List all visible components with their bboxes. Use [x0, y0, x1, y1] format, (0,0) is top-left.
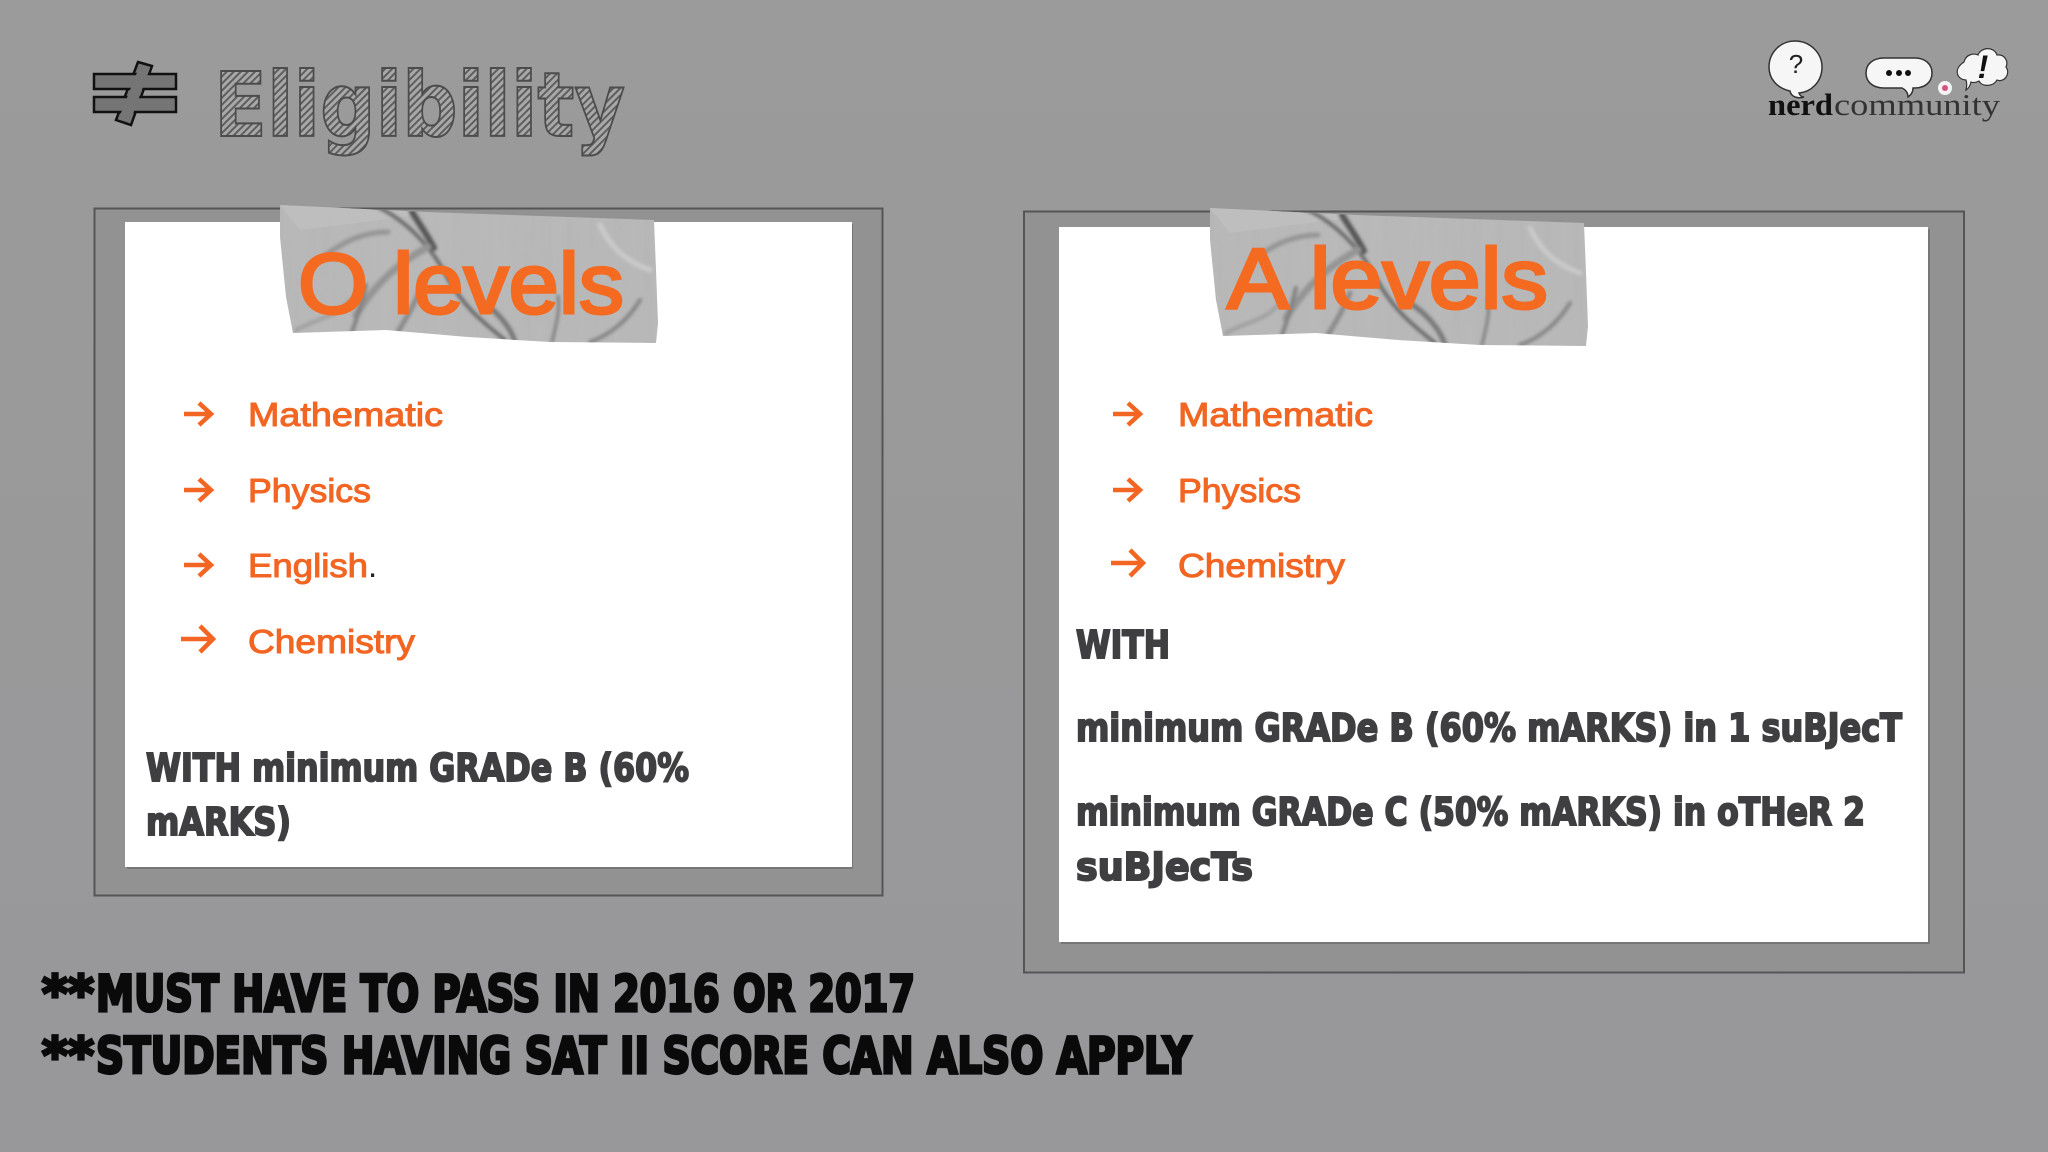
- footnotes: MUST HAVE TO PASS IN 2016 OR 2017: [96, 965, 915, 1023]
- list: subjects: [1111, 396, 1373, 584]
- panel frame: [94, 208, 882, 896]
- icon: question speech bubble: ?: [1789, 49, 1803, 79]
- panel: A levels: [1024, 206, 1964, 972]
- icon: exclamation cloud bubble: !: [1978, 49, 1989, 85]
- item: Physics: Physics: [1178, 472, 1301, 509]
- requirement text: WITH: [1076, 623, 1170, 667]
- requirement text: WITH minimum GRADe B (60%: [146, 746, 689, 790]
- item: Chemistry: Chemistry: [1178, 547, 1346, 584]
- requirement text: minimum GRADe B (60% mARKS) in 1 suBJecT: [1076, 706, 1902, 750]
- icon: not-equal symbol: [94, 62, 176, 125]
- title: Eligibility: [214, 53, 625, 157]
- panel: O levels: [94, 203, 882, 896]
- tape: [1208, 206, 1590, 348]
- arrow: [1113, 403, 1140, 425]
- requirement text: suBJecTs: [1076, 845, 1253, 889]
- heading: O levels: O levels: [298, 237, 624, 332]
- heading: A levels: A levels: [1227, 232, 1548, 327]
- footnotes: **: [42, 1027, 94, 1085]
- logo wordmark: nerd: [1768, 87, 1833, 122]
- footnotes: **: [42, 965, 94, 1023]
- item: Mathematic: Mathematic: [248, 396, 443, 433]
- item: English: English .: [248, 547, 377, 584]
- paper sheet: [125, 222, 853, 869]
- requirement text: mARKS): [146, 800, 291, 844]
- tape: [278, 203, 660, 345]
- item: Chemistry: Chemistry: [248, 623, 416, 660]
- icon: question speech bubble: [1769, 41, 1822, 98]
- item: Physics: Physics: [248, 472, 371, 509]
- list: subjects: [181, 396, 443, 660]
- arrow: [184, 554, 211, 576]
- requirement text: [1076, 623, 1902, 889]
- arrow: [1113, 479, 1140, 501]
- icon: heart bubble: [1938, 81, 1952, 95]
- arrow: [184, 403, 211, 425]
- footnotes: [42, 965, 1192, 1085]
- requirement text: [146, 746, 689, 844]
- arrow: [1111, 550, 1143, 576]
- logo wordmark: community: [1834, 87, 2001, 122]
- icon: ellipsis speech bubble: [1866, 58, 1932, 97]
- arrow: [181, 626, 213, 652]
- logo wordmark: [1768, 87, 2001, 122]
- footnotes: STUDENTS HAVING SAT II SCORE CAN ALSO APPLY: [96, 1027, 1192, 1085]
- panel frame: [1024, 212, 1964, 972]
- item: Mathematic: Mathematic: [1178, 396, 1373, 433]
- requirement text: minimum GRADe C (50% mARKS) in oTHeR 2: [1076, 790, 1865, 834]
- icon: exclamation cloud bubble: [1957, 49, 2008, 90]
- logo: nerdcommunity: [1768, 41, 2008, 122]
- arrow: [184, 479, 211, 501]
- paper sheet: [1059, 227, 1930, 944]
